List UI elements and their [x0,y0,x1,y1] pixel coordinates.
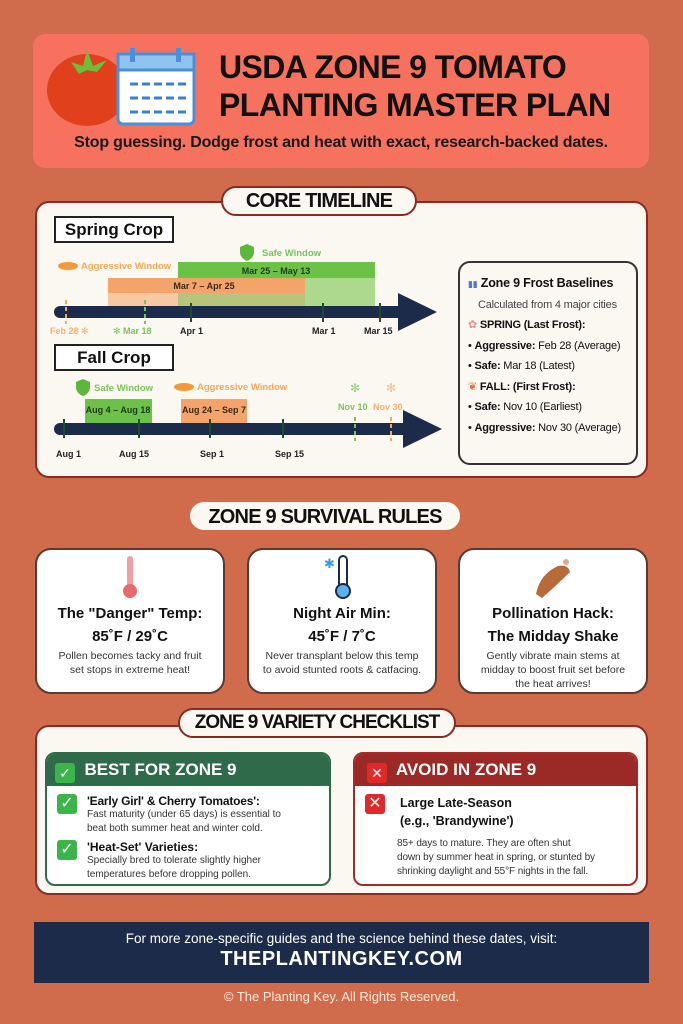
spring timeline [50,216,437,336]
chart: spring bars: Mar 1 [312,326,336,336]
card: danger temp: set stops in extreme heat! [70,664,190,676]
chart: fall bars: Nov 10 [338,402,368,412]
card: night air: to avoid stunted roots & catfacing. [263,664,421,676]
heading: best [47,754,329,786]
title [219,49,611,123]
chart: fall bars: ✻ [350,381,360,395]
panel: frost baselines: • Safe: Nov 10 (Earliest) [468,401,582,413]
chart: fall bars: Aug 15 [119,449,149,459]
panel: frost baselines: • Aggressive: Feb 28 (Average) [468,340,620,352]
item: large late-season: 85+ days to mature. They are often shut [397,838,571,849]
item: large late-season: shrinking daylight and 55°F nights in the fall. [397,866,588,877]
card: night air: Never transplant below this temp [266,650,418,662]
panel: frost baselines: • Safe: Mar 18 (Latest) [468,360,575,372]
chart: spring bars: ✻ Mar 18 [113,326,152,336]
chart: spring bars: Apr 1 [180,326,203,336]
icon: tomato [47,50,116,126]
heading: survival rules [190,502,460,530]
footer banner: For more zone-specific guides and the science behind these dates, visit: [126,931,557,946]
chart: fall bars: Aug 1 [56,449,81,459]
icon: cold thermometer: ✱ [324,556,335,571]
item: heat-set [57,840,261,880]
card: night air [247,548,437,694]
card: night air: Night Air Min: [293,605,391,622]
item: large late-season: ✕ [368,795,382,812]
fall timeline [54,344,442,459]
panel: frost baselines: Calculated from 4 major cities [478,298,617,310]
item: heat-set: temperatures before dropping pollen. [87,869,251,880]
heading: avoid: AVOID IN ZONE 9 [396,760,536,779]
item: large late-season: (e.g., 'Brandywine') [400,814,514,828]
footer banner: THEPLANTINGKEY.COM [220,948,463,970]
panel: frost baselines: ▮▮ Zone 9 Frost Baselines [468,276,613,290]
card: pollination: midday to boost fruit set before [481,664,625,676]
card: danger temp [35,548,225,694]
label: spring crop: Spring Crop [65,220,163,239]
card: danger temp: The "Danger" Temp: [58,605,202,622]
card: danger temp: 85˚F / 29˚C [92,628,168,645]
heading: variety checklist [178,708,456,738]
chart: spring bars: Mar 25 – May 13 [242,266,310,276]
item: early girl [57,794,281,834]
chart: spring bars: Aggressive Window [81,261,172,272]
heading: avoid [355,754,636,786]
chart: fall bars: Safe Window [94,383,154,394]
card: night air: 45˚F / 7˚C [308,628,376,645]
icon: thermometer [123,556,137,598]
card: pollination: Pollination Hack: [492,605,614,622]
icon: hand shaking stem [536,559,570,598]
chart: fall bars: Nov 30 [373,402,403,412]
chart: spring bars: Safe Window [262,248,322,259]
panel: variety checklist [35,725,648,895]
panel: frost baselines [458,261,638,465]
item: early girl: ✓ [60,795,74,812]
chart: fall bars: Aug 24 – Sep 7 [182,405,246,415]
label: fall crop: Fall Crop [77,348,151,367]
label: spring crop [54,216,174,243]
chart: fall bars: Sep 1 [200,449,224,459]
heading: best: BEST FOR ZONE 9 [84,760,237,779]
panel: best for zone 9 [45,752,331,886]
panel: frost baselines: ✿ SPRING (Last Frost): [468,319,585,331]
chart: fall bars: Sep 15 [275,449,304,459]
title: USDA ZONE 9 TOMATO [219,49,566,85]
chart: spring bars: Mar 15 [364,326,393,336]
chart: fall bars [54,379,442,459]
item: heat-set: ✓ [60,841,74,858]
chart: fall bars: Aug 4 – Aug 18 [86,405,150,415]
chart: fall bars: Aggressive Window [197,382,288,393]
heading: avoid: ✕ [371,765,383,781]
card: pollination: The Midday Shake [488,628,618,645]
item: large late-season: down by summer heat in spring, or stunted by [397,852,595,863]
item: large late-season [365,794,595,877]
icon: cold thermometer [324,555,351,599]
item: heat-set: 'Heat-Set' Varieties: [87,840,198,854]
item: heat-set: Specially bred to tolerate slightly higher [87,855,261,866]
heading: variety checklist: ZONE 9 VARIETY CHECKLIST [195,712,439,733]
heading: survival rules: ZONE 9 SURVIVAL RULES [208,506,442,528]
heading: core timeline [221,186,417,216]
title: PLANTING MASTER PLAN [219,87,611,123]
item: early girl: 'Early Girl' & Cherry Tomatoes': [87,794,260,808]
card: danger temp: Pollen becomes tacky and fruit [58,650,202,662]
subtitle: Stop guessing. Dodge frost and heat with exact, research-backed dates. [74,134,608,151]
label: fall crop [54,344,174,371]
panel: frost baselines: • Aggressive: Nov 30 (Average) [468,422,621,434]
heading: core timeline: CORE TIMELINE [246,190,392,212]
copyright: © The Planting Key. All Rights Reserved. [224,989,459,1004]
panel: avoid in zone 9 [353,752,638,886]
card: pollination [458,548,648,694]
panel: core timeline [35,201,648,478]
chart: spring bars [50,244,437,336]
chart: spring bars: Mar 7 – Apr 25 [173,281,235,291]
card: pollination: Gently vibrate main stems at [486,650,620,662]
item: early girl: beat both summer heat and winter cold. [87,823,263,834]
header banner [33,34,649,168]
item: large late-season: Large Late-Season [400,796,512,810]
footer banner [34,922,649,983]
panel: frost baselines: ❦ FALL: (First Frost): [468,380,575,392]
card: pollination: the heat arrives! [515,678,591,690]
heading: best: ✓ [59,765,71,781]
item: early girl: Fast maturity (under 65 days) is essential to [87,809,281,820]
chart: spring bars: Feb 28 ✻ [50,326,89,336]
chart: fall bars: ✻ [386,381,396,395]
icon: calendar [116,48,196,126]
